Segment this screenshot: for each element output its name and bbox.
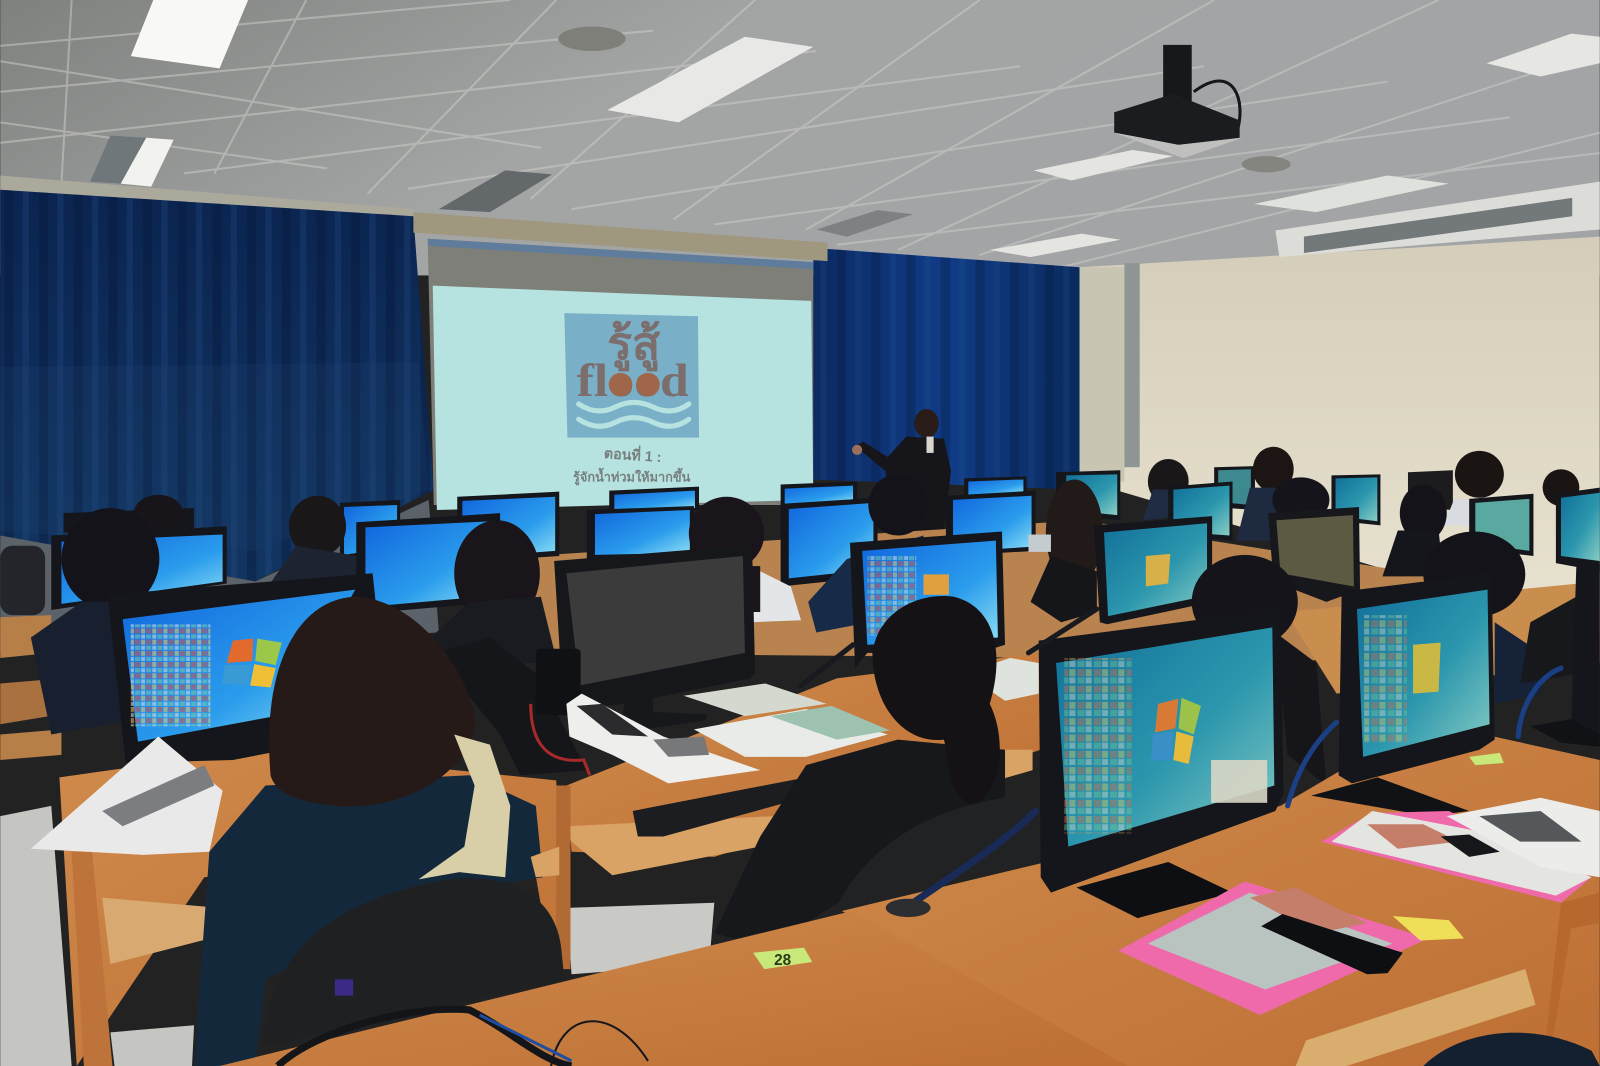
left front monitor [107,573,376,763]
projection screen [428,239,813,510]
chair, ponytail student [837,796,1041,908]
student left with dark jacket [31,508,163,734]
desk legs and drawer [72,785,570,1066]
jacket [194,775,543,1066]
foreground woman [194,597,543,1066]
back row monitors [63,466,1453,563]
student in blue, behind monitor [808,474,928,632]
presenter [852,409,951,530]
windows logo, big [1151,698,1201,764]
right curtain [813,248,1080,490]
logo text: flood: flood [577,355,689,407]
smartphone [1261,914,1403,974]
desk number tag, right [1469,753,1504,765]
back row students [134,447,1579,581]
third row monitor right [1094,516,1212,624]
keyboard [633,777,811,836]
second row monitors [51,481,1600,614]
student with long hair, centre-left [431,520,557,663]
side wall [1080,237,1600,632]
far right monitor [1530,564,1600,747]
logo waves [579,402,689,426]
student white shirt [689,497,801,622]
drawer shelf front right [1296,969,1535,1066]
dark monitor right [1268,507,1360,602]
floor centre [567,903,714,974]
front desk with number tag: 28 [774,952,792,969]
chair, foreground left [263,878,564,1046]
windows logo [223,639,282,688]
middle monitor, dark screen [554,545,755,730]
snack wrapper [1393,916,1464,941]
student in front of olive monitor [1192,555,1326,785]
front desk with number tag [220,911,1127,1066]
logo faces in the letters o [609,373,660,396]
projection screen housing [413,212,828,261]
right student [1423,531,1581,704]
slide subtitle: รู้จักน้ำท่วมให้มากขึ้น [573,467,691,485]
cornice rail [0,175,413,219]
monitor cable arcs [801,609,1561,917]
logo panel [564,313,699,438]
ceiling lights [90,0,1600,257]
student at tablet [1029,479,1103,622]
big foreground monitor [1039,609,1284,918]
logo text: thai: รู้สู้ [607,318,661,372]
air conditioner [1275,182,1600,257]
floor left [0,806,72,1066]
hair [269,597,475,807]
desktop icons [131,624,210,726]
middle row desk [566,653,1041,857]
desk divider [1546,893,1600,1051]
right large monitor [1311,573,1495,816]
rear right desk [1286,581,1600,694]
ceiling [0,0,1600,275]
papers on middle desk [684,658,1039,757]
third row monitor centre [850,531,1005,668]
right side desk [842,734,1600,1066]
pink folder [1118,881,1428,1015]
pink binder and papers right [1321,798,1600,903]
front left desk [59,750,566,1066]
back wall lower band [0,500,439,653]
camera bag and camera [434,638,590,775]
desk edge [566,750,1033,875]
scarf [418,734,510,879]
slide caption: ตอนที่ 1 : [603,442,662,466]
ponytail student [714,596,1005,938]
headphones cable foreground [278,1009,648,1066]
desk divider edge, foreground [531,847,559,877]
foreground sleeve, bottom right [1423,1033,1600,1066]
loose handouts left [31,737,223,855]
left curtain [0,190,434,581]
open booklet [566,694,760,783]
projector [1114,45,1243,158]
back row desks [531,520,1600,663]
left wall rack and bag [0,546,61,760]
floor patch under left desk [110,1025,194,1066]
